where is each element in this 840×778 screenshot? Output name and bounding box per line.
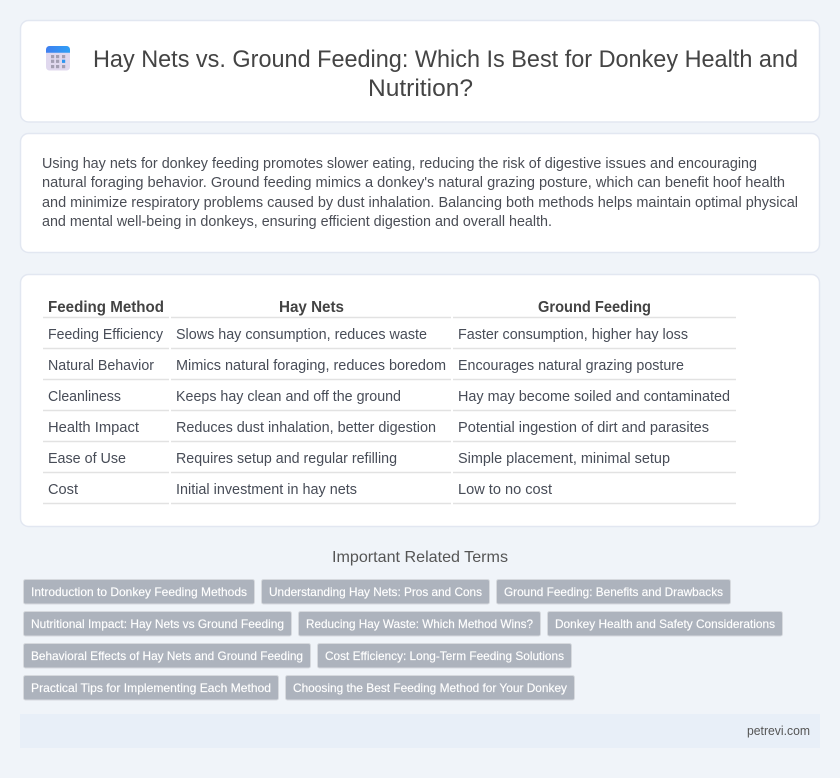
row: ease of use: Requires setup and regular refilling — [176, 451, 397, 467]
table header: Feeding Method — [48, 299, 164, 316]
intro paragraph: and mental well-being in donkeys, ensuring efficient digestion and overall health. — [42, 214, 552, 230]
related term tags — [24, 580, 782, 700]
related term tags: Behavioral Effects of Hay Nets and Ground Feeding — [31, 649, 303, 663]
intro paragraph: natural foraging behavior. Ground feeding mimics a donkey's natural grazing posture, which can benefit hoof health — [42, 175, 785, 191]
table header: Ground Feeding — [538, 299, 651, 316]
related term tags: Reducing Hay Waste: Which Method Wins? — [306, 617, 533, 631]
related term tags: Ground Feeding: Benefits and Drawbacks — [504, 585, 723, 599]
title text: Hay Nets vs. Ground Feeding: Which Is Best for Donkey Health and — [93, 46, 798, 73]
row: cleanliness — [48, 389, 730, 405]
related term tags: Choosing the Best Feeding Method for Your Donkey — [293, 681, 567, 695]
row: ease of use — [48, 451, 670, 467]
panel: introduction — [20, 134, 820, 252]
intro paragraph: Using hay nets for donkey feeding promotes slower eating, reducing the risk of digestive issues and encouraging — [42, 156, 757, 172]
row: feeding efficiency: Faster consumption, higher hay loss — [458, 327, 688, 343]
row: natural behavior: Encourages natural grazing posture — [458, 358, 684, 374]
panel: comparison table — [20, 274, 820, 526]
related term tags: Cost Efficiency: Long-Term Feeding Solutions — [325, 649, 564, 663]
row: health impact — [48, 420, 709, 436]
related term tags: Practical Tips for Implementing Each Method — [31, 681, 271, 695]
row: health impact: Health Impact — [48, 420, 139, 436]
footer — [20, 714, 820, 748]
row: natural behavior: Natural Behavior — [48, 358, 154, 374]
row: health impact: Potential ingestion of dirt and parasites — [458, 420, 709, 436]
row: feeding efficiency: Feeding Efficiency — [48, 327, 164, 343]
footer: petrevi.com — [747, 724, 810, 738]
title text: Nutrition? — [368, 75, 473, 102]
row: cleanliness: Keeps hay clean and off the ground — [176, 389, 401, 405]
related term tags: Nutritional Impact: Hay Nets vs Ground Feeding — [31, 617, 284, 631]
intro paragraph: and minimize respiratory problems caused by dust inhalation. Balancing both methods helps maintain optimal physical — [42, 195, 798, 211]
row: feeding efficiency: Slows hay consumption, reduces waste — [176, 327, 427, 343]
panel: title — [20, 20, 820, 122]
row: cleanliness: Hay may become soiled and contaminated — [458, 389, 730, 405]
title text — [93, 46, 798, 102]
icon: calendar — [46, 46, 70, 70]
row: cost: Low to no cost — [458, 482, 552, 498]
row: natural behavior: Mimics natural foraging, reduces boredom — [176, 358, 446, 374]
table header — [48, 299, 651, 316]
related term tags: Introduction to Donkey Feeding Methods — [31, 585, 247, 599]
intro paragraph — [42, 156, 798, 230]
row: feeding efficiency — [48, 327, 688, 343]
table header: Hay Nets — [279, 299, 344, 316]
row: cost: Cost — [48, 482, 78, 498]
row: ease of use: Simple placement, minimal setup — [458, 451, 670, 467]
row: natural behavior — [48, 358, 684, 374]
row: health impact: Reduces dust inhalation, better digestion — [176, 420, 436, 436]
related term tags: Donkey Health and Safety Considerations — [555, 617, 775, 631]
related term tags: Understanding Hay Nets: Pros and Cons — [269, 585, 482, 599]
row: ease of use: Ease of Use — [48, 451, 126, 467]
heading: related terms: Important Related Terms — [332, 549, 508, 566]
row: cost — [48, 482, 552, 498]
row: cost: Initial investment in hay nets — [176, 482, 357, 498]
row: cleanliness: Cleanliness — [48, 389, 121, 405]
